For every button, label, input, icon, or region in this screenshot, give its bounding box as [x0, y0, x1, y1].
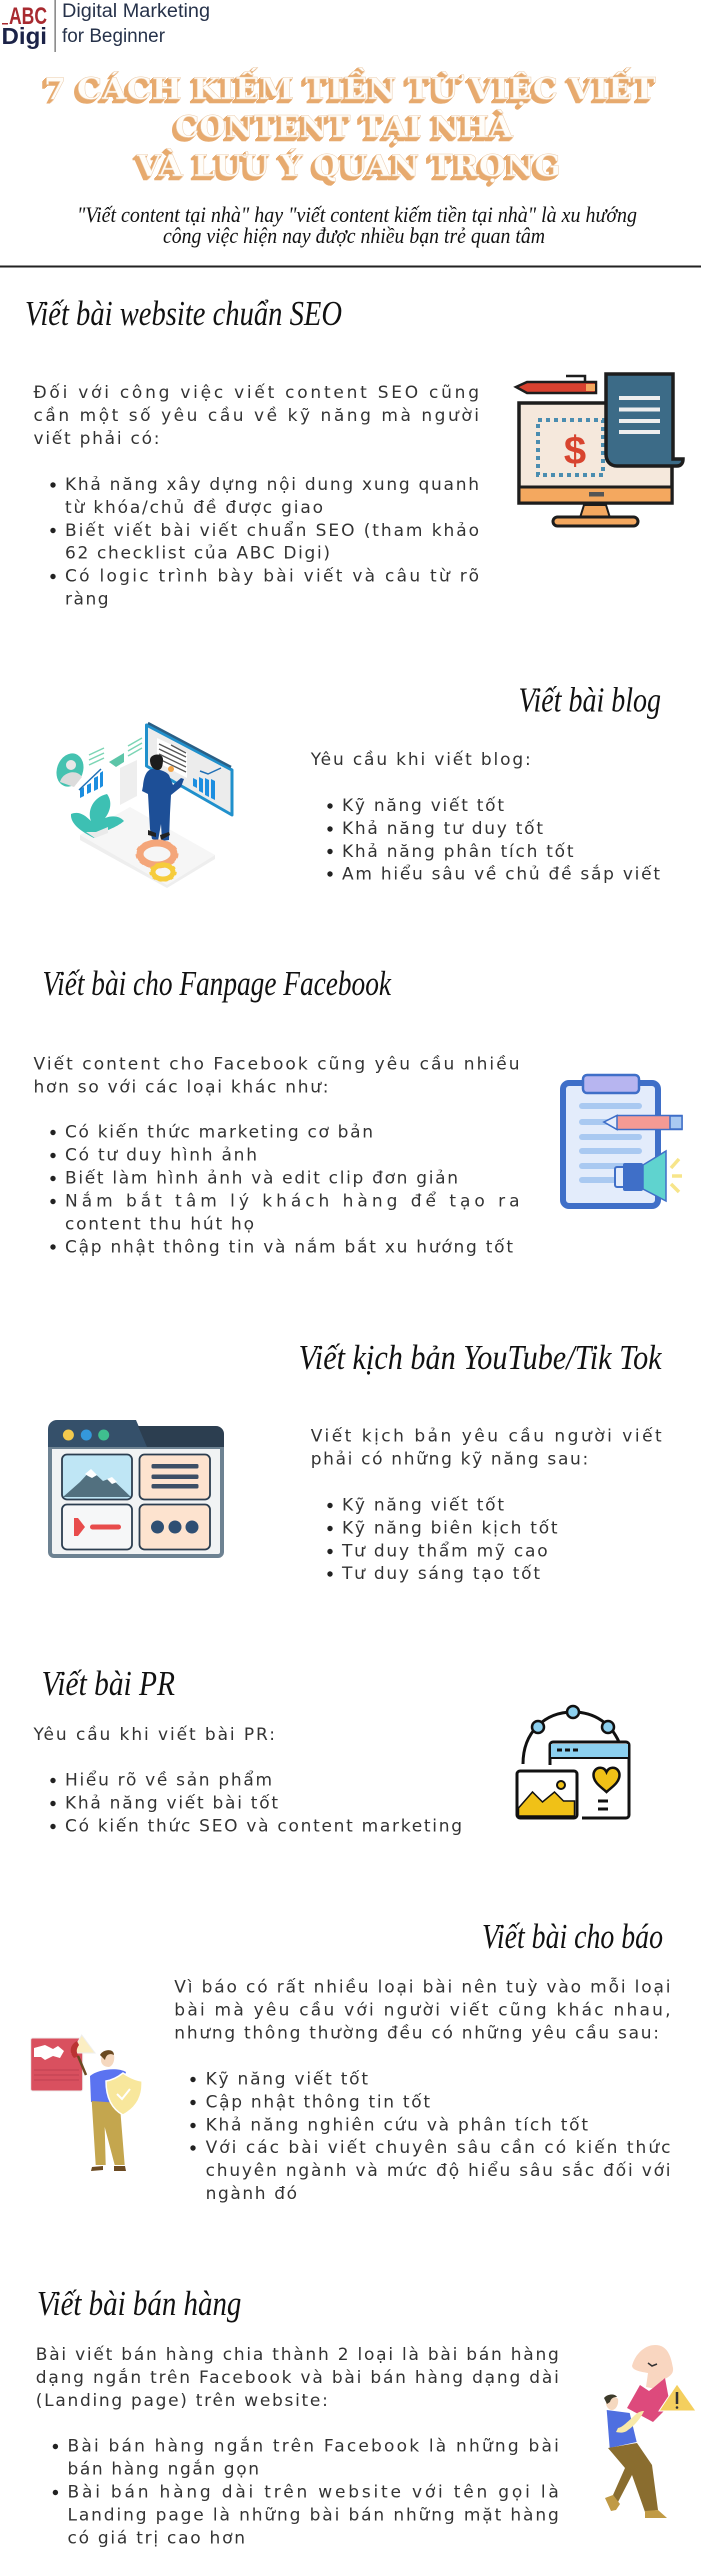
list: PR skills: Có kiến thức SEO và content marketing: [65, 1816, 462, 1836]
list: sales points: Bài bán hàng ngắn trên Facebook là những bài: [68, 2436, 559, 2456]
list: script skills: Kỹ năng biên kịch tốt: [342, 1518, 558, 1538]
list: newspaper skills: Cập nhật thông tin tốt: [206, 2092, 430, 2112]
text block: script intro: phải có những kỹ năng sau:: [311, 1450, 588, 1470]
text block: sales intro: (Landing page) trên website:: [36, 2391, 328, 2411]
list: sales points: có giá trị cao hơn: [68, 2528, 245, 2548]
heading: blog: Viết bài blog: [518, 680, 661, 720]
panel: Fanpage Facebook: [34, 964, 682, 1258]
list: newspaper skills: [190, 2068, 671, 2204]
list: SEO skills: [50, 475, 479, 610]
list: newspaper skills: ngành đó: [206, 2184, 297, 2204]
list: newspaper skills: Với các bài viết chuyên sâu cần có kiến thức: [206, 2137, 670, 2158]
text block: Facebook intro: hơn so với các loại khác như:: [34, 1078, 328, 1098]
text block: newspaper intro: nhưng thông thường đều có những yêu cầu sau:: [174, 2022, 659, 2044]
list: blog skills: Khả năng tư duy tốt: [342, 818, 543, 839]
list: SEO skills: Khả năng xây dựng nội dung xung quanh: [65, 475, 479, 495]
list: Facebook skills: Có tư duy hình ảnh: [65, 1146, 257, 1166]
heading: PR: Viết bài PR: [42, 1664, 175, 1703]
list: sales points: Bài bán hàng dài trên website với tên gọi là: [68, 2482, 559, 2502]
text block: sales intro: Bài viết bán hàng chia thành 2 loại là bài bán hàng: [36, 2344, 559, 2365]
subtitle: công việc hiện nay được nhiều bạn trẻ quan tâm: [163, 223, 545, 248]
list: blog skills: Am hiểu sâu về chủ đề sắp viết: [342, 864, 660, 884]
list: PR skills: [50, 1770, 462, 1836]
text block: SEO intro: cần một số yêu cầu về kỹ năng mà người: [34, 405, 479, 426]
text block: script intro: [311, 1426, 662, 1470]
list: newspaper skills: Khả năng nghiên cứu và phân tích tốt: [206, 2114, 588, 2136]
list: script skills: Kỹ năng viết tốt: [342, 1494, 504, 1516]
list: Facebook skills: content thu hút họ: [65, 1214, 254, 1234]
list: blog skills: Kỹ năng viết tốt: [342, 795, 504, 816]
text block: newspaper intro: [174, 1976, 671, 2044]
list: Facebook skills: [50, 1122, 520, 1258]
text block: newspaper intro: bài mà yêu cầu với người viết cũng khác nhau,: [174, 2000, 671, 2020]
icon: person with shield: [31, 2035, 142, 2171]
text block: SEO intro: Đối với công việc viết content SEO cũng: [34, 382, 479, 403]
panel: sales writing: [36, 2284, 696, 2548]
title: CONTENT TẠI NHÀ: [175, 109, 514, 145]
list: sales points: Landing page là những bài bán những mặt hàng: [68, 2506, 559, 2526]
text block: script intro: Viết kịch bản yêu cầu người viết: [311, 1426, 662, 1446]
text block: newspaper intro: Vì báo có rất nhiều loại bài nên tuỳ vào mỗi loại: [174, 1976, 671, 1998]
logo: ABC Digi: Digi: [2, 23, 47, 49]
icon: monitor with pen and document: [516, 374, 683, 526]
title: VÀ LƯU Ý QUAN TRỌNG: [136, 148, 561, 184]
title: 7 CÁCH KIẾM TIỀN TỪ VIỆC VIẾT: [44, 67, 657, 107]
list: newspaper skills: Kỹ năng viết tốt: [206, 2068, 368, 2090]
title: [44, 67, 657, 184]
list: PR skills: Khả năng viết bài tốt: [65, 1792, 278, 1814]
list: Facebook skills: Nắm bắt tâm lý khách hàng để tạo ra: [65, 1190, 520, 1212]
icon: man carrying woman with warning sign: [604, 2345, 696, 2518]
panel: website SEO: [25, 294, 683, 610]
list: sales points: bán hàng ngắn gọn: [68, 2458, 259, 2480]
list: Facebook skills: Có kiến thức marketing cơ bản: [65, 1122, 373, 1142]
icon: clipboard with pencil and speaker: [563, 1075, 682, 1206]
heading: website SEO: Viết bài website chuẩn SEO: [25, 294, 342, 333]
list: script skills: Tư duy sáng tạo tốt: [341, 1563, 540, 1584]
list: PR skills: Hiểu rõ về sản phẩm: [65, 1770, 272, 1790]
list: newspaper skills: chuyên ngành và mức độ hiểu sâu sắc đối với: [206, 2160, 670, 2181]
text block: blog intro: Yêu cầu khi viết blog:: [310, 749, 531, 770]
logo: ABC Digi: [2, 0, 210, 52]
icon: monitor with pen and document: $: [564, 429, 586, 473]
list: Facebook skills: Cập nhật thông tin và nắm bắt xu hướng tốt: [65, 1236, 513, 1258]
list: SEO skills: Biết viết bài viết chuẩn SEO (tham khảo: [65, 520, 479, 541]
list: SEO skills: 62 checklist của ABC Digi): [65, 544, 330, 564]
subtitle: "Viết content tại nhà" hay "viết content kiếm tiền tại nhà" là xu hướng: [77, 202, 637, 227]
list: sales points: [53, 2436, 559, 2548]
list: Facebook skills: Biết làm hình ảnh và edit clip đơn giản: [65, 1168, 458, 1188]
text block: sales intro: dạng ngắn trên Facebook và bài bán hàng dạng dài: [36, 2367, 559, 2388]
text block: SEO intro: [34, 382, 479, 449]
subtitle: [77, 202, 637, 248]
logo: ABC Digi: Digital Marketing: [62, 1, 210, 22]
logo: ABC Digi: ABC: [9, 3, 47, 30]
logo: ABC Digi: for Beginner: [62, 26, 166, 47]
panel: YouTube/Tik Tok: [48, 1338, 663, 1584]
text block: SEO intro: viết phải có:: [34, 428, 160, 449]
icon: network arc with image and heart: [517, 1706, 629, 1818]
list: blog skills: [327, 795, 660, 884]
panel: newspaper writing: [31, 1917, 671, 2204]
panel: blog: [52, 680, 661, 888]
list: blog skills: Khả năng phân tích tốt: [342, 841, 574, 862]
list: script skills: [327, 1494, 558, 1584]
text block: Facebook intro: Viết content cho Facebook cũng yêu cầu nhiều: [34, 1054, 520, 1074]
panel: PR: [32, 1664, 629, 1836]
text block: PR intro: Yêu cầu khi viết bài PR:: [32, 1724, 275, 1745]
list: SEO skills: Có logic trình bày bài viết và câu từ rõ: [65, 566, 479, 586]
text block: sales intro: [36, 2344, 559, 2411]
heading: Fanpage Facebook: Viết bài cho Fanpage Facebook: [42, 964, 392, 1003]
icon: browser window: [48, 1420, 224, 1558]
text block: Facebook intro: [34, 1054, 520, 1098]
list: SEO skills: từ khóa/chủ đề được giao: [65, 497, 323, 518]
heading: sales: Viết bài bán hàng: [37, 2284, 241, 2323]
list: SEO skills: ràng: [65, 590, 109, 610]
list: script skills: Tư duy thẩm mỹ cao: [341, 1540, 548, 1562]
icon: isometric man with dashboard: [52, 723, 232, 888]
